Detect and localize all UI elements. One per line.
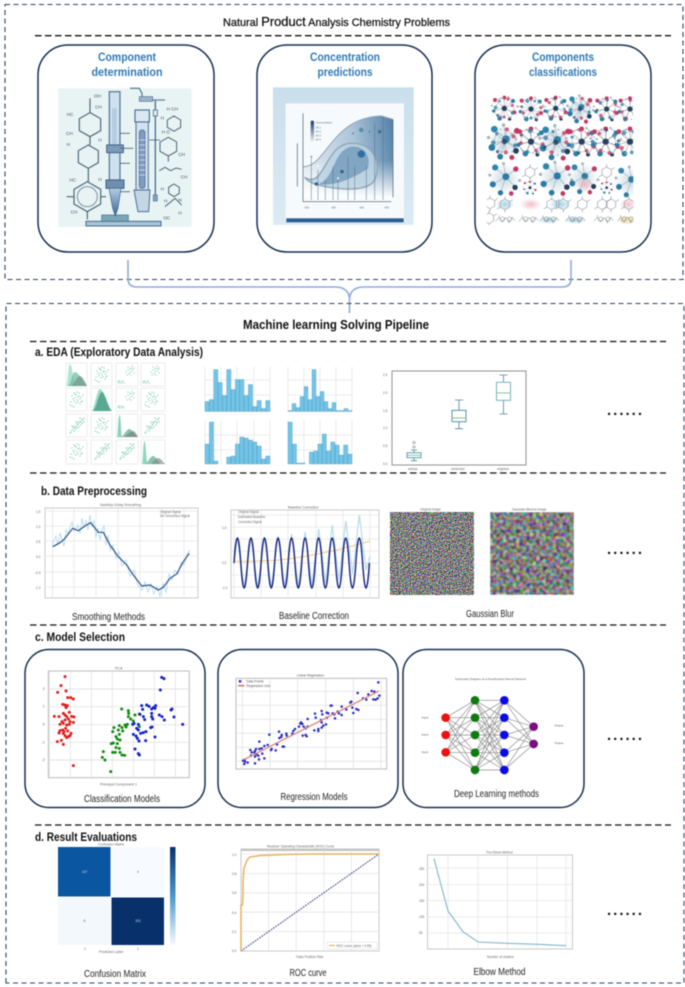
illustration: molecular structure grid <box>486 94 634 226</box>
chart: smoothing: 0.0 <box>36 555 41 559</box>
chart: PCA scatter: 0 <box>43 723 45 727</box>
section b: data preprocessing <box>35 486 642 623</box>
diagram: feedforward neural network <box>422 677 563 774</box>
chart: box plot: 2.0 <box>383 391 388 395</box>
chart: PCA scatter: Principal Component 1 <box>100 783 137 787</box>
illustration: chromatography apparatus with molecules: H <box>164 199 167 204</box>
pipeline border <box>6 304 684 983</box>
chart: linear regression: Regression Line <box>246 684 271 688</box>
illustration: chromatography apparatus with molecules: OH <box>94 93 101 98</box>
chart: linear regression: Linear Regression <box>297 674 324 678</box>
chart: elbow method: 150 <box>419 899 425 903</box>
chart: baseline correction <box>222 506 379 598</box>
illustration: concentration curve plot <box>273 87 414 225</box>
chart: PCA scatter: 1 <box>43 705 45 709</box>
panel border <box>5 4 683 280</box>
chart: elbow method <box>419 850 572 959</box>
illustration: concentration curve plot: 000 <box>331 205 336 209</box>
card: components classifications <box>475 45 651 252</box>
chart: smoothing: 1.5 <box>36 510 41 514</box>
chart: ROC curve: ROC curve (area = 0.99) <box>336 944 372 948</box>
chart: confusion matrix: 8 <box>84 919 86 923</box>
caption: Smoothing Methods <box>72 612 145 623</box>
chart: confusion matrix: 1 <box>137 947 139 951</box>
illustration: chromatography apparatus with molecules: CH <box>95 105 102 110</box>
illustration: chromatography apparatus with molecules: H O <box>162 129 170 134</box>
caption: Deep Learning methods <box>454 789 539 800</box>
chart: smoothing: -0.5 <box>35 571 41 575</box>
illustration: chromatography apparatus with molecules: HC <box>69 178 77 183</box>
chart: smoothing: Savitzky-Golay Smoothing <box>100 503 141 507</box>
chart: elbow method: 50 <box>419 931 423 935</box>
caption: Baseline Correction <box>279 611 349 622</box>
illustration: chromatography apparatus with molecules: CH <box>181 175 187 180</box>
illustration: chromatography apparatus with molecules: CH <box>71 209 77 214</box>
card: deep learning methods <box>403 650 584 808</box>
illustration: chromatography apparatus with molecules <box>58 88 192 227</box>
chart: box plot <box>383 371 526 471</box>
diagram: feedforward neural network: Input <box>422 715 428 719</box>
caption: Classification Models <box>84 794 160 805</box>
diagram: feedforward neural network: Output <box>554 724 563 728</box>
chart: feature histograms <box>205 367 352 464</box>
chart: box plot: 0.0 <box>383 462 388 466</box>
caption: Elbow Method <box>474 967 526 978</box>
panel: machine learning solving pipeline <box>6 304 684 983</box>
chart: PCA scatter: -1 <box>42 740 45 744</box>
section c: model selection <box>25 632 642 808</box>
chart: smoothing: Original Signal <box>160 510 181 514</box>
chart: pair plot <box>66 363 165 464</box>
diagram: feedforward neural network: Output <box>554 741 563 745</box>
illustration: chromatography apparatus with molecules: H <box>161 187 164 192</box>
chart: confusion matrix: 137 <box>82 870 87 874</box>
chart: smoothing: 0.5 <box>36 540 41 544</box>
section d: result evaluations <box>35 832 642 980</box>
chart: baseline correction: -1.0 <box>222 586 228 590</box>
illustration: chromatography apparatus with molecules: H <box>161 115 164 120</box>
card: regression models <box>218 650 398 808</box>
chart: PCA scatter: 2 <box>43 687 45 691</box>
illustration: chromatography apparatus with molecules: HC <box>67 112 74 117</box>
illustration: chromatography apparatus with molecules: H CH <box>167 107 178 112</box>
chart: linear regression: Data Points <box>246 680 264 684</box>
chart: baseline correction: Corrected Signal <box>238 520 262 524</box>
chart: ROC curve: 0.4 <box>232 911 237 915</box>
caption: Regression Models <box>280 792 348 803</box>
chart: smoothing: -1.0 <box>35 586 41 590</box>
card heading: classifications <box>529 65 597 79</box>
section heading: b. Data Preprocessing <box>41 486 147 498</box>
chart: ROC curve: 1.0 <box>232 853 237 857</box>
illustration: concentration curve plot: 00.2 <box>316 129 321 133</box>
card heading: Component <box>98 50 156 64</box>
section a: exploratory data analysis <box>35 347 642 471</box>
image: gaussian blurred noise: Gaussian Blurred Image <box>512 508 547 512</box>
chart: baseline correction: Original Signal <box>238 510 259 514</box>
chart: confusion matrix: 151 <box>135 919 141 923</box>
chart: baseline correction: 1.0 <box>222 526 227 530</box>
chart: PCA scatter: PCA <box>115 667 123 671</box>
chart: elbow method: 250 <box>419 867 425 871</box>
chart: box plot: setosa <box>408 467 418 471</box>
chart: box plot: versicolor <box>451 467 466 471</box>
illustration: concentration curve plot: 000 <box>360 205 365 209</box>
chart: confusion matrix: 0 <box>84 947 86 951</box>
illustration: concentration curve plot: 000 <box>305 205 310 209</box>
pipeline title: Machine learning Solving Pipeline <box>243 318 429 332</box>
illustration: chromatography apparatus with molecules: CH <box>66 131 73 136</box>
illustration: chromatography apparatus with molecules: OC <box>163 215 171 220</box>
title: Natural Product Analysis Chemistry Problems <box>223 14 450 29</box>
panel: natural product analysis problems <box>5 4 683 280</box>
chart: smoothing <box>35 503 198 598</box>
image: gaussian blurred noise <box>490 508 574 595</box>
chart: PCA scatter: -2 <box>42 758 45 762</box>
chart: confusion matrix <box>58 842 176 954</box>
image: original noise: Original Image <box>420 508 441 512</box>
section heading: a. EDA (Exploratory Data Analysis) <box>35 347 203 359</box>
illustration: concentration curve plot: 000 <box>385 205 390 209</box>
ellipsis: ...... <box>607 727 642 744</box>
chart: ROC curve: 0.8 <box>232 872 237 876</box>
diagram: feedforward neural network: Schematic Diagram of a Feedforward Neural Network <box>455 677 526 681</box>
chart: ROC curve: False Positive Rate <box>296 955 324 959</box>
card: concentration predictions <box>257 45 432 252</box>
chart: ROC curve: 0.0 <box>232 949 237 953</box>
illustration: concentration curve plot: 00.1 <box>316 125 321 129</box>
chart: elbow method: 100 <box>419 915 425 919</box>
ellipsis: ...... <box>607 541 642 558</box>
card heading: determination <box>92 65 162 79</box>
chart: confusion matrix: Predicted Label <box>99 950 123 954</box>
illustration: concentration curve plot: 00.3 <box>316 133 321 137</box>
chart: confusion matrix: Confusion Matrix <box>98 842 124 846</box>
chart: PCA scatter <box>42 667 189 787</box>
chart: linear regression <box>236 674 387 769</box>
section heading: c. Model Selection <box>35 632 125 644</box>
caption: Confusion Matrix <box>84 969 146 980</box>
chart: baseline correction: Estimated Baseline <box>238 515 266 519</box>
illustration: chromatography apparatus with molecules: H <box>98 177 102 182</box>
chart: ROC curve: 0.6 <box>232 891 237 895</box>
chart: box plot: 0.5 <box>383 444 388 448</box>
illustration: chromatography apparatus with molecules: H <box>98 137 102 142</box>
illustration: chromatography apparatus with molecules: H <box>67 142 70 147</box>
chart: ROC curve: 0.2 <box>232 930 237 934</box>
diagram: feedforward neural network: Input <box>422 750 428 754</box>
illustration: chromatography apparatus with molecules: H <box>178 210 182 215</box>
card heading: predictions <box>318 65 373 79</box>
ellipsis: ...... <box>607 402 642 419</box>
chart: box plot: 1.5 <box>383 409 388 413</box>
chart: smoothing: SG Smoothed Signal <box>160 514 190 518</box>
chart: smoothing: 1.0 <box>36 525 41 529</box>
card heading: Components <box>532 50 594 64</box>
illustration: chromatography apparatus with molecules: N <box>178 198 182 203</box>
image: original noise <box>390 508 474 595</box>
chart: baseline correction: 0.0 <box>222 561 227 565</box>
chart: elbow method: 200 <box>419 883 425 887</box>
chart: baseline correction: Baseline Correction <box>288 506 319 510</box>
illustration: concentration curve plot: 00.4 <box>316 137 321 141</box>
card: component determination <box>38 45 214 252</box>
chart: confusion matrix: 4 <box>137 870 139 874</box>
caption: ROC curve <box>290 968 327 979</box>
chart: ROC curve <box>232 844 379 959</box>
chart: box plot: 1.0 <box>383 426 388 430</box>
caption: Gaussian Blur <box>466 609 515 620</box>
chart: box plot: virginica <box>497 467 509 471</box>
chart: elbow method: Number of clusters <box>487 955 514 959</box>
chart: ROC curve: Receiver Operating Characteristic (ROC) Curve <box>267 844 335 848</box>
ellipsis: ...... <box>607 902 642 919</box>
bracket connector <box>128 260 571 313</box>
chart: box plot: 2.5 <box>383 373 388 377</box>
diagram: feedforward neural network: Input <box>422 733 428 737</box>
card: classification models <box>25 650 205 808</box>
section heading: d. Result Evaluations <box>35 832 137 844</box>
chart: elbow method: The Elbow Method <box>486 850 513 854</box>
illustration: chromatography apparatus with molecules: CH <box>178 152 185 157</box>
illustration: concentration curve plot: Concentration <box>316 120 333 124</box>
card heading: Concentration <box>310 50 380 64</box>
